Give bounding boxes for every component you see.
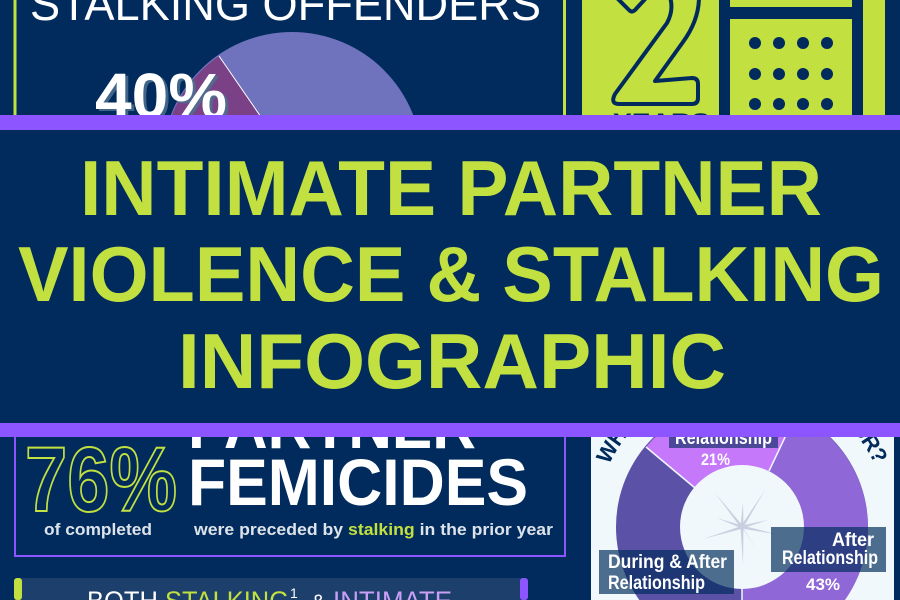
label: during relationship (669, 425, 778, 469)
icon: outlined numeral 2 (613, 0, 699, 104)
title: VIOLENCE & STALKING (18, 230, 884, 318)
label: after relationship: After (832, 530, 875, 551)
heading: partner femicides: PARTNER (188, 388, 476, 462)
icon: star burst (703, 490, 780, 565)
curved heading: WHEN DOES STALKING OCCUR? (596, 437, 886, 462)
title (18, 144, 884, 405)
label: during and after relationship: Relationship (608, 573, 705, 594)
statistic: 76 percent: 76% (25, 429, 177, 531)
donut chart (616, 401, 868, 600)
label: during and after relationship (599, 550, 734, 594)
caption: of completed: of completed (44, 520, 152, 539)
label: during relationship: 21% (701, 450, 730, 469)
caption: preceded by stalking: were preceded by stalking in the prior year (193, 520, 553, 539)
panel: partner femicides (15, 388, 565, 556)
panel: when does stalking occur (591, 428, 894, 600)
panel: stalking offenders (14, 0, 541, 292)
statistic: 40 percent: 40% (98, 62, 230, 134)
heading: partner femicides: FEMICIDES (188, 445, 528, 519)
heading: partner femicides (188, 388, 528, 519)
label: years: YEARS (613, 109, 710, 136)
icon: calendar dots (749, 37, 833, 110)
label: during relationship: Relationship (675, 428, 772, 449)
panel: both stalking and intimate (14, 578, 528, 600)
curved heading (596, 437, 886, 462)
pie chart (162, 32, 422, 292)
title banner (0, 115, 900, 437)
label: after relationship (771, 527, 886, 594)
label: after relationship: Relationship (782, 548, 878, 569)
heading: both stalking and intimate (87, 585, 452, 600)
title: INFOGRAPHIC (178, 317, 726, 405)
title: INTIMATE PARTNER (80, 144, 822, 232)
label: after relationship: 43% (806, 575, 840, 594)
panel: two years calendar (563, 0, 885, 136)
statistic: 40 percent: 40% (95, 60, 227, 132)
label: during and after relationship: During & After (608, 552, 728, 573)
